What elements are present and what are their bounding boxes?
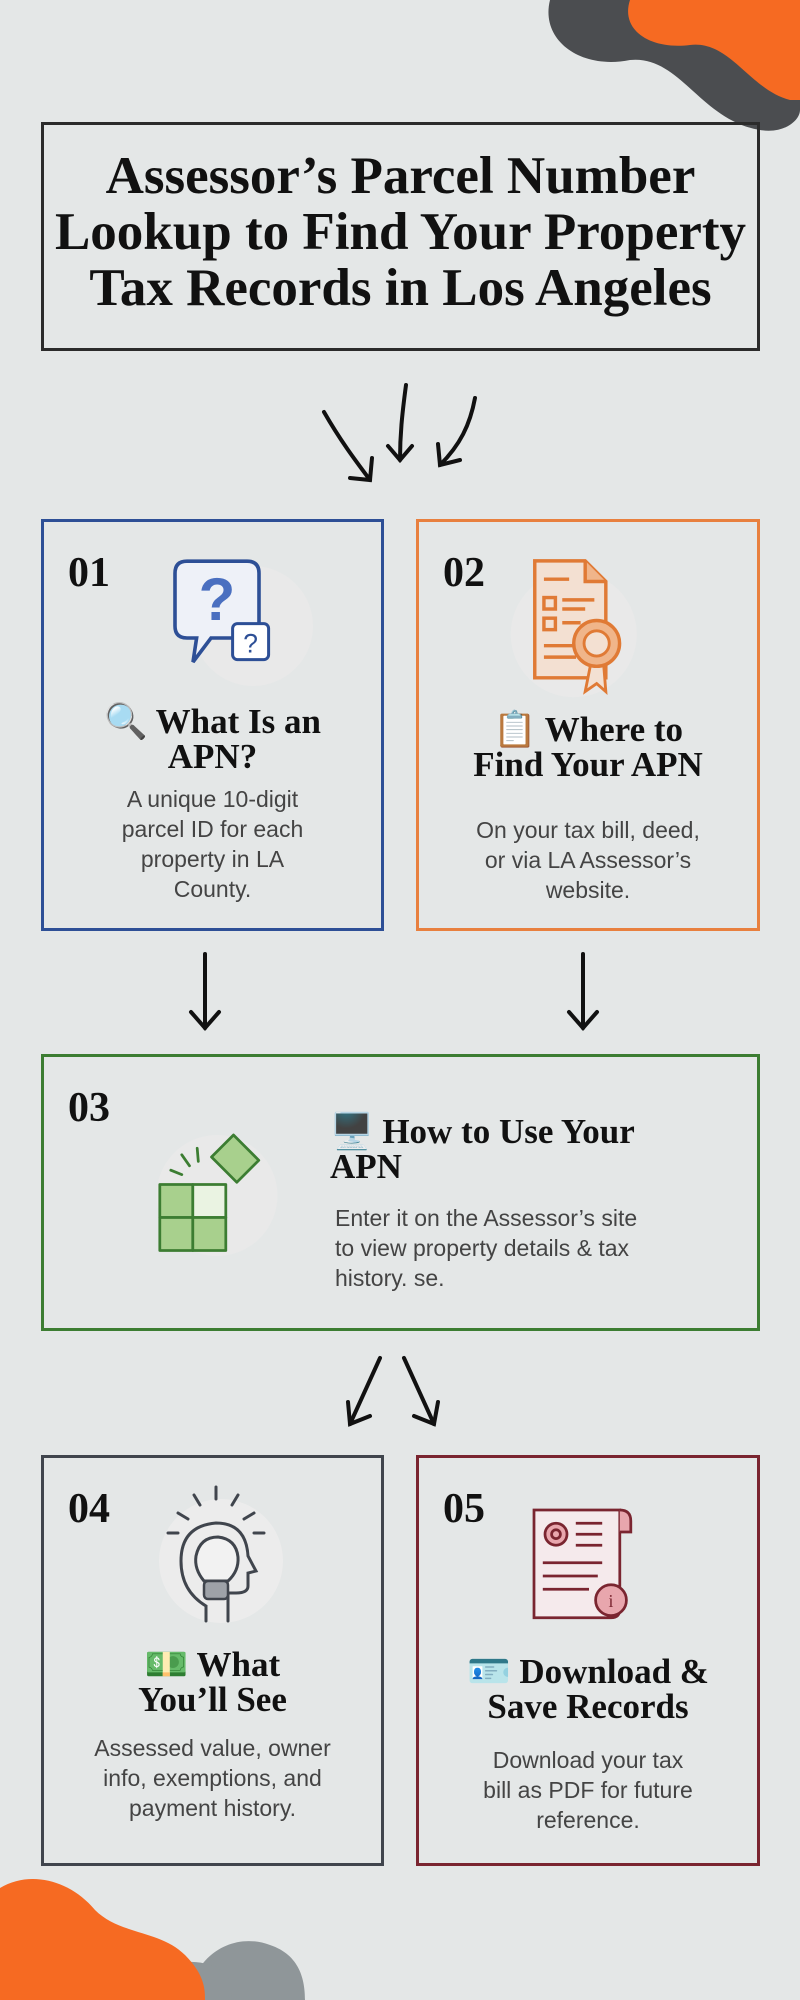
body text: A unique 10-digit xyxy=(127,786,298,812)
panel 02: 02 xyxy=(443,550,485,596)
arrow down left xyxy=(188,952,222,1031)
heading: Save Records xyxy=(487,1687,689,1726)
heading: 💵 What xyxy=(145,1645,280,1684)
heading xyxy=(467,1652,709,1726)
body text: payment history. xyxy=(129,1795,296,1821)
decorative blobs top right xyxy=(548,0,800,131)
panel 02 xyxy=(416,519,760,931)
body text: Assessed value, owner xyxy=(94,1735,331,1761)
heading: 📋 Where to xyxy=(493,710,683,749)
body text: info, exemptions, and xyxy=(103,1765,322,1791)
title: Assessor’s Parcel Number xyxy=(106,147,695,205)
icon: settings document: i xyxy=(609,1591,614,1611)
heading xyxy=(473,710,703,784)
body text xyxy=(483,1747,693,1833)
heading: 🪪 Download & xyxy=(467,1652,709,1691)
title: Lookup to Find Your Property xyxy=(55,203,746,261)
title xyxy=(41,122,760,351)
panel 01: 01 xyxy=(68,550,110,596)
body text: On your tax bill, deed, xyxy=(476,817,700,843)
body text: or via LA Assessor’s xyxy=(485,847,691,873)
heading: APN xyxy=(330,1147,402,1186)
body text: website. xyxy=(546,877,630,903)
heading: You’ll See xyxy=(138,1680,287,1719)
arrow down right xyxy=(566,952,600,1031)
panel 03 xyxy=(41,1054,760,1331)
body text: County. xyxy=(174,876,251,902)
body text xyxy=(335,1205,637,1291)
icon: settings document xyxy=(532,1508,632,1620)
icon: question bubbles xyxy=(173,559,270,664)
arrows: three converging xyxy=(322,383,477,482)
body text: history. se. xyxy=(335,1265,444,1291)
body text xyxy=(122,786,303,902)
icon: puzzle xyxy=(158,1134,260,1252)
title: Tax Records in Los Angeles xyxy=(89,259,712,317)
body text: to view property details & tax xyxy=(335,1235,629,1261)
body text: reference. xyxy=(536,1807,640,1833)
heading: APN? xyxy=(168,737,257,776)
body text xyxy=(94,1735,331,1821)
body text xyxy=(476,817,700,903)
panel 04: 04 xyxy=(68,1486,110,1532)
heading xyxy=(330,1112,635,1186)
body text: property in LA xyxy=(141,846,284,872)
body text: Enter it on the Assessor’s site xyxy=(335,1205,637,1231)
icon: certificate document xyxy=(533,559,622,695)
heading xyxy=(104,702,321,776)
panel 05 xyxy=(416,1455,760,1866)
icon: question bubbles: ? xyxy=(199,566,235,633)
panel 01 xyxy=(41,519,384,931)
body text: bill as PDF for future xyxy=(483,1777,693,1803)
body text: Download your tax xyxy=(493,1747,683,1773)
icon: question bubbles: ? xyxy=(243,628,258,658)
heading: Find Your APN xyxy=(473,745,703,784)
decorative blobs bottom left xyxy=(0,1879,305,2000)
panel 05: 05 xyxy=(443,1486,485,1532)
panel 03: 03 xyxy=(68,1085,110,1131)
panel 04 xyxy=(41,1455,384,1866)
icon: lightbulb head xyxy=(166,1486,266,1622)
heading: 🖥️ How to Use Your xyxy=(330,1112,635,1151)
heading: 🔍 What Is an xyxy=(104,702,321,741)
heading xyxy=(138,1645,287,1719)
body text: parcel ID for each xyxy=(122,816,303,842)
arrows: diverging xyxy=(346,1356,440,1427)
